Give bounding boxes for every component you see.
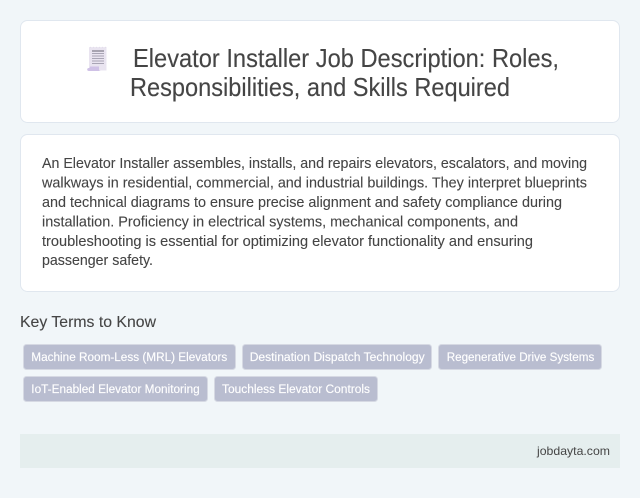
chip: touchless controls [214, 376, 378, 402]
text block: description: and technical diagrams to ensure precise alignment and safety compliance during [42, 195, 562, 211]
chip: touchless controls: Touchless Elevator Controls [222, 382, 370, 396]
heading: key terms: Key Terms to Know [20, 314, 156, 331]
text block: description: walkways in residential, commercial, and industrial buildings. They interpret blueprints [41, 176, 587, 192]
title: Responsibilities, and Skills Required [130, 74, 510, 102]
title [130, 45, 559, 102]
chip: destination dispatch: Destination Dispatch Technology [250, 350, 425, 364]
footer bar [20, 434, 620, 468]
text block: description: An Elevator Installer assembles, installs, and repairs elevators, escalators, and moving [42, 156, 587, 172]
chip: IoT monitoring: IoT-Enabled Elevator Monitoring [31, 382, 200, 396]
title: Elevator Installer Job Description: Roles, [133, 45, 559, 73]
text block: description: passenger safety. [42, 253, 153, 269]
footer source: jobdayta.com [536, 444, 610, 458]
icon: document scroll [87, 47, 107, 71]
panel: description card [20, 134, 620, 292]
chip: destination dispatch [242, 344, 432, 370]
text block: description [41, 156, 587, 269]
chip: MRL elevators [24, 344, 236, 370]
chip: regenerative drive [438, 344, 602, 370]
chip: regenerative drive: Regenerative Drive Systems [447, 350, 594, 364]
text block: description: troubleshooting is essential for optimizing elevator functionality and ensuring [42, 234, 533, 250]
chip: MRL elevators: Machine Room-Less (MRL) Elevators [31, 350, 227, 364]
chips: key terms [24, 344, 602, 402]
chip: IoT monitoring [24, 376, 208, 402]
panel: title card [20, 20, 620, 122]
text block: description: installation. Proficiency in electrical systems, mechanical components, and [42, 214, 518, 230]
